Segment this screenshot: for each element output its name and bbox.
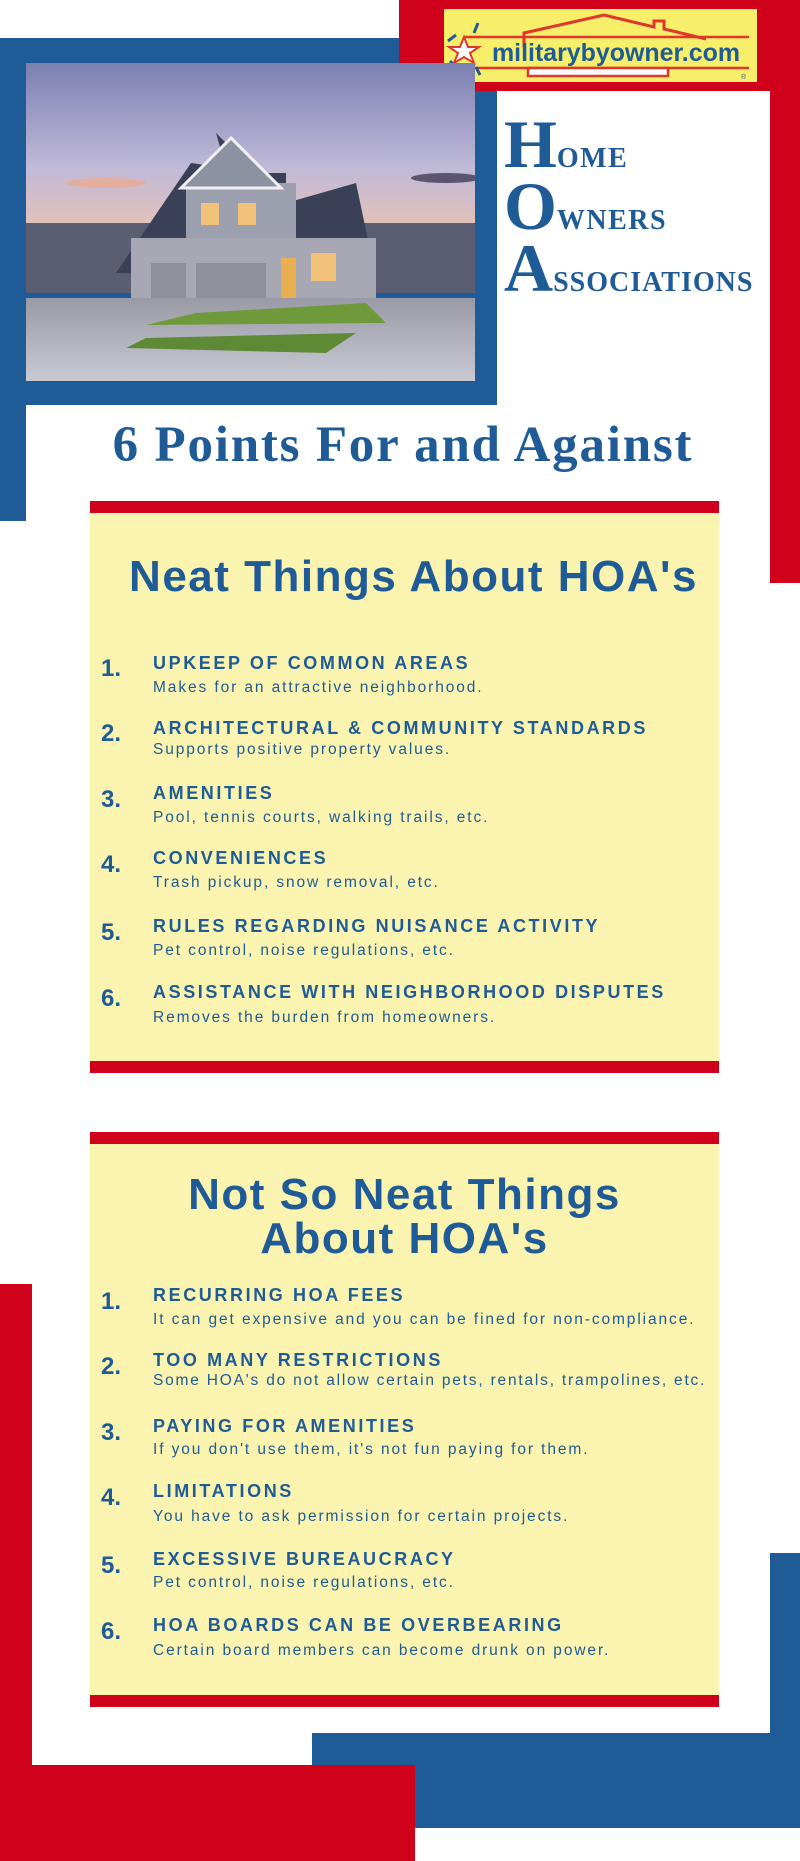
text: HOA BOARDS CAN BE OVERBEARING (153, 1615, 564, 1635)
text: Makes for an attractive neighborhood. (153, 679, 484, 696)
text: 2. (101, 1353, 121, 1380)
text: Supports positive property values. (153, 741, 451, 758)
logo: militarybyowner.com: ® (741, 73, 747, 81)
text: 3. (101, 786, 121, 813)
text: ARCHITECTURAL & COMMUNITY STANDARDS (153, 718, 648, 738)
heading: Not So Neat Things About HOA's: About HOA's (260, 1214, 549, 1263)
text: 5. (101, 919, 121, 946)
text: 6. (101, 985, 121, 1012)
text: ASSISTANCE WITH NEIGHBORHOOD DISPUTES (153, 982, 666, 1002)
text: TOO MANY RESTRICTIONS (153, 1350, 443, 1370)
logo: militarybyowner.com (444, 9, 757, 82)
text: CONVENIENCES (153, 848, 328, 868)
text: You have to ask permission for certain projects. (153, 1508, 569, 1525)
logo: militarybyowner.com: militarybyowner.com (492, 39, 740, 67)
text: It can get expensive and you can be fined for non-compliance. (153, 1311, 695, 1328)
text: 4. (101, 851, 121, 878)
text: Some HOA's do not allow certain pets, rentals, trampolines, etc. (153, 1372, 706, 1389)
panel: not so neat things (90, 1132, 719, 1707)
heading: Not So Neat Things About HOA's (188, 1170, 621, 1263)
text: EXCESSIVE BUREAUCRACY (153, 1549, 456, 1569)
decorative frame: red top block (399, 0, 800, 91)
panel: neat things (90, 501, 719, 1073)
text: 1. (101, 655, 121, 682)
text: RULES REGARDING NUISANCE ACTIVITY (153, 916, 600, 936)
text: 2. (101, 720, 121, 747)
text: AMENITIES (153, 783, 274, 803)
text: Pet control, noise regulations, etc. (153, 942, 455, 959)
text: If you don't use them, it's not fun paying for them. (153, 1441, 589, 1458)
text: 6. (101, 1618, 121, 1645)
photo: house at dusk (26, 63, 475, 381)
decorative frame: blue photo frame (0, 38, 497, 405)
subtitle: 6 Points For and Against: 6 Points For and Against (113, 417, 693, 473)
text: UPKEEP OF COMMON AREAS (153, 653, 470, 673)
text: PAYING FOR AMENITIES (153, 1416, 416, 1436)
text: Certain board members can become drunk on power. (153, 1642, 610, 1659)
heading: Not So Neat Things About HOA's: Not So Neat Things (188, 1170, 621, 1219)
text: 3. (101, 1419, 121, 1446)
title: HOA Home Owners Associations: OWNERS (504, 168, 667, 244)
heading: Neat Things About HOA's: Neat Things About HOA's (129, 552, 698, 601)
text: RECURRING HOA FEES (153, 1285, 405, 1305)
text: 4. (101, 1484, 121, 1511)
decorative frame: red right bar (770, 0, 800, 583)
decorative frame: blue left strip (0, 38, 26, 521)
text: 1. (101, 1288, 121, 1315)
text: Pool, tennis courts, walking trails, etc. (153, 809, 489, 826)
decorative: bottom frame (0, 1284, 32, 1861)
text: Pet control, noise regulations, etc. (153, 1574, 455, 1591)
title: HOA Home Owners Associations: HOME (504, 106, 628, 182)
title: HOA Home Owners Associations (504, 106, 753, 306)
list: pros (90, 640, 719, 1040)
text: LIMITATIONS (153, 1481, 294, 1501)
title: HOA Home Owners Associations: ASSOCIATIONS (504, 230, 753, 306)
text: Removes the burden from homeowners. (153, 1009, 496, 1026)
text: 5. (101, 1552, 121, 1579)
text: Trash pickup, snow removal, etc. (153, 874, 440, 891)
